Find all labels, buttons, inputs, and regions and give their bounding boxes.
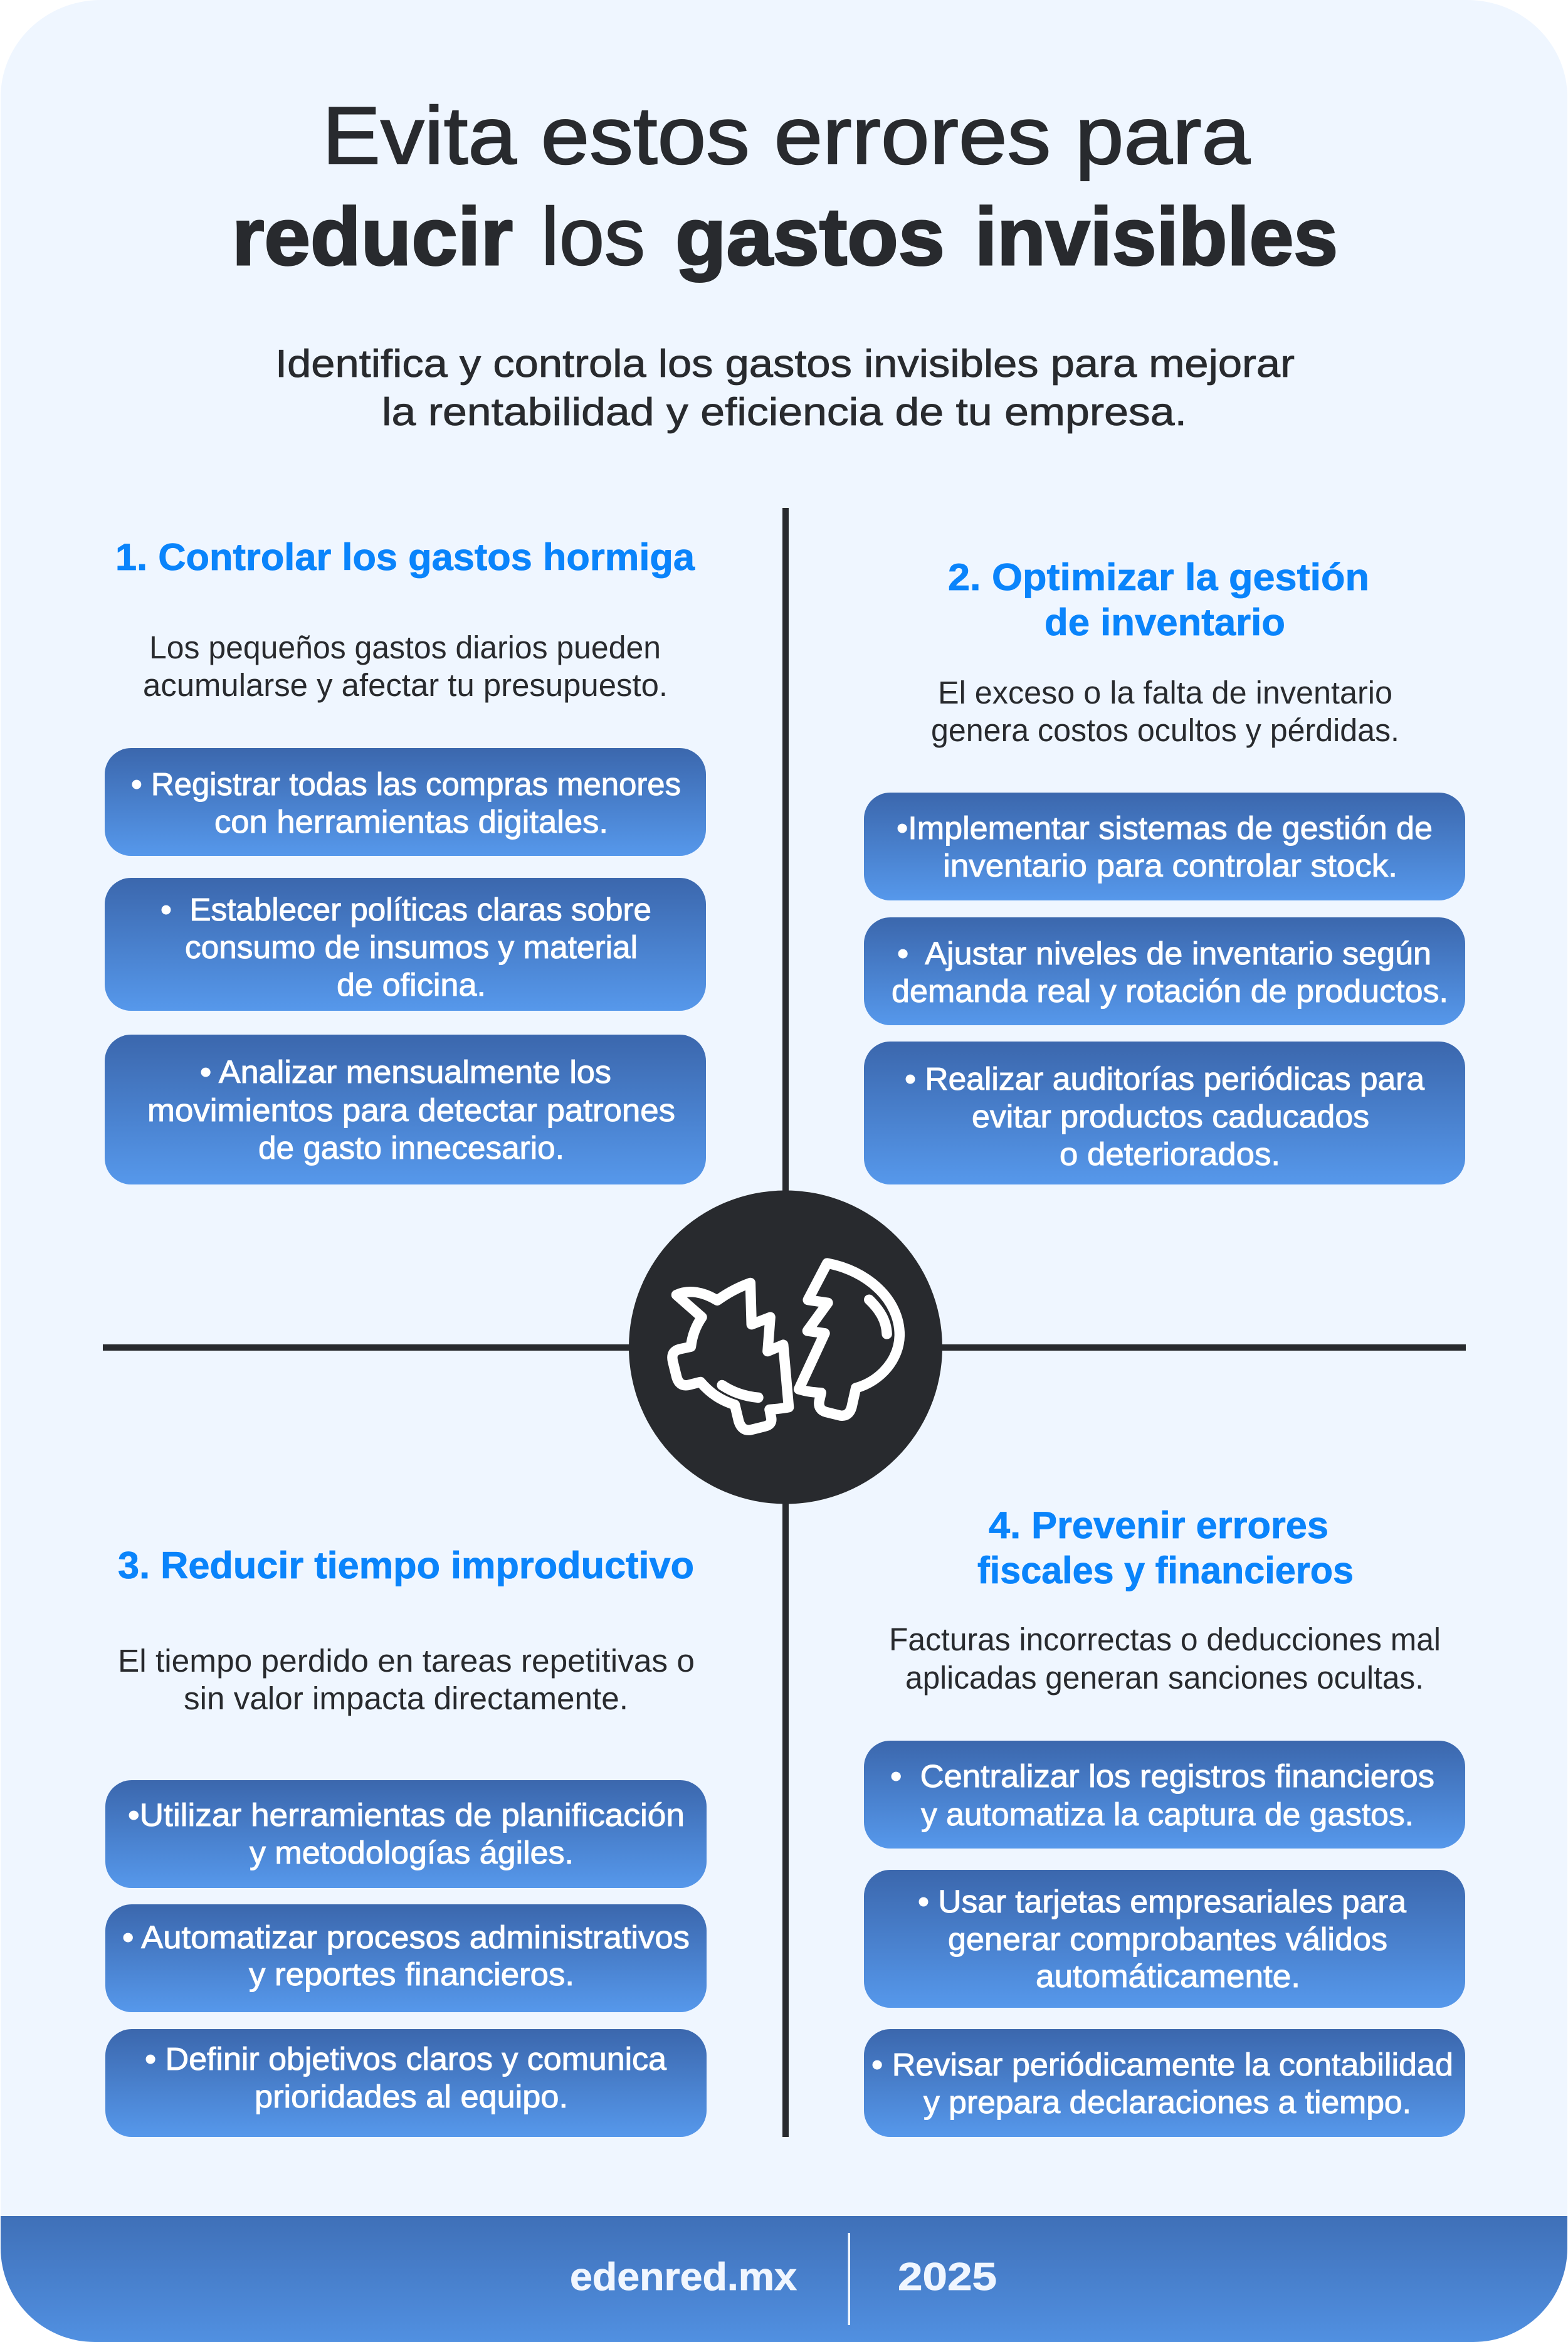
description 4: aplicadas generan sanciones ocultas. <box>905 1660 1424 1696</box>
card 4.1: y automatiza la captura de gastos. <box>921 1796 1414 1832</box>
panel: 3 tiempo improductivo <box>105 1544 707 2137</box>
title: invisibles <box>975 191 1338 282</box>
description 3 <box>118 1643 695 1716</box>
card 2.3: evitar productos caducados <box>972 1099 1369 1134</box>
heading 4 <box>977 1504 1354 1591</box>
description 1 <box>143 630 668 703</box>
title: los <box>541 191 645 282</box>
card 4.2: generar comprobantes válidos <box>948 1921 1387 1957</box>
card 2.1: •Implementar sistemas de gestión de <box>897 810 1433 846</box>
card 4.1 <box>864 1741 1465 1849</box>
card 4.1: • Centralizar los registros financieros <box>890 1758 1434 1794</box>
card 3.3 <box>105 2029 707 2137</box>
card 2.3: • Realizar auditorías periódicas para <box>905 1061 1425 1097</box>
card 2.1: inventario para controlar stock. <box>943 848 1397 884</box>
card 4.2: • Usar tarjetas empresariales para <box>918 1884 1407 1919</box>
footer divider <box>848 2233 850 2325</box>
footer site: edenred.mx <box>570 2255 797 2299</box>
heading 2: 2. Optimizar la gestión <box>948 556 1369 598</box>
subtitle <box>275 342 1295 434</box>
subtitle: la rentabilidad y eficiencia de tu empresa. <box>382 391 1187 434</box>
card 1.2: de oficina. <box>337 967 486 1003</box>
description 3: El tiempo perdido en tareas repetitivas o <box>118 1643 695 1679</box>
footer year: 2025 <box>898 2255 997 2299</box>
card 1.2: • Establecer políticas claras sobre <box>160 892 651 927</box>
card 1.1: • Registrar todas las compras menores <box>131 766 681 802</box>
title: reducir <box>232 191 513 282</box>
title: Evita estos errores para <box>322 90 1251 181</box>
description 2: genera costos ocultos y pérdidas. <box>931 712 1399 748</box>
heading 4: 4. Prevenir errores <box>989 1504 1329 1546</box>
card 4.3 <box>864 2029 1465 2137</box>
description 3: sin valor impacta directamente. <box>184 1680 628 1716</box>
card 2.1 <box>864 793 1465 900</box>
footer <box>1 2216 1567 2342</box>
heading 2 <box>948 556 1369 643</box>
panel: 4 errores fiscales <box>864 1504 1465 2137</box>
card 1.2: consumo de insumos y material <box>185 929 638 965</box>
card 1.1 <box>105 748 706 856</box>
title: gastos <box>675 191 945 282</box>
heading 1: 1. Controlar los gastos hormiga <box>115 536 695 578</box>
card 3.2: y reportes financieros. <box>249 1956 574 1992</box>
panel: 2 inventario <box>864 556 1465 1184</box>
horizontal divider <box>103 1344 1466 1351</box>
card 2.2: • Ajustar niveles de inventario según <box>897 936 1431 971</box>
heading 4: fiscales y financieros <box>977 1549 1354 1591</box>
card 1.2 <box>105 878 706 1011</box>
description 2 <box>931 675 1399 748</box>
card 2.2: demanda real y rotación de productos. <box>892 973 1448 1009</box>
card 3.1 <box>105 1780 707 1888</box>
heading 3: 3. Reducir tiempo improductivo <box>118 1544 694 1586</box>
description 1: Los pequeños gastos diarios pueden <box>149 630 661 665</box>
card 3.3: prioridades al equipo. <box>255 2079 568 2114</box>
card 3.2 <box>105 1904 707 2012</box>
description 2: El exceso o la falta de inventario <box>938 675 1392 710</box>
card 3.1: •Utilizar herramientas de planificación <box>128 1797 685 1833</box>
vertical divider <box>782 508 789 2137</box>
title <box>232 90 1338 282</box>
card 3.1: y metodologías ágiles. <box>250 1835 574 1870</box>
description 4: Facturas incorrectas o deducciones mal <box>889 1622 1441 1657</box>
card 1.1: con herramientas digitales. <box>214 804 608 840</box>
card 1.3: de gasto innecesario. <box>258 1130 564 1166</box>
description 4 <box>889 1622 1441 1696</box>
heading 2: de inventario <box>1044 601 1285 643</box>
card 1.3: • Analizar mensualmente los <box>200 1054 611 1090</box>
card 1.3: movimientos para detectar patrones <box>147 1092 675 1128</box>
card 4.2 <box>864 1870 1465 2008</box>
subtitle: Identifica y controla los gastos invisibles para mejorar <box>275 342 1295 386</box>
card 2.2 <box>864 917 1465 1025</box>
card 2.3: o deteriorados. <box>1060 1136 1280 1172</box>
card 3.2: • Automatizar procesos administrativos <box>122 1919 690 1955</box>
card 2.3 <box>864 1042 1465 1184</box>
center badge: broken piggy bank icon <box>629 1190 942 1504</box>
panel: 1 gastos hormiga <box>105 536 706 1184</box>
description 1: acumularse y afectar tu presupuesto. <box>143 667 668 703</box>
card 3.3: • Definir objetivos claros y comunica <box>145 2041 667 2077</box>
card 4.3: y prepara declaraciones a tiempo. <box>923 2084 1411 2120</box>
card 4.2: automáticamente. <box>1036 1958 1300 1994</box>
card 4.3: • Revisar periódicamente la contabilidad <box>871 2047 1453 2082</box>
card 1.3 <box>105 1035 706 1184</box>
